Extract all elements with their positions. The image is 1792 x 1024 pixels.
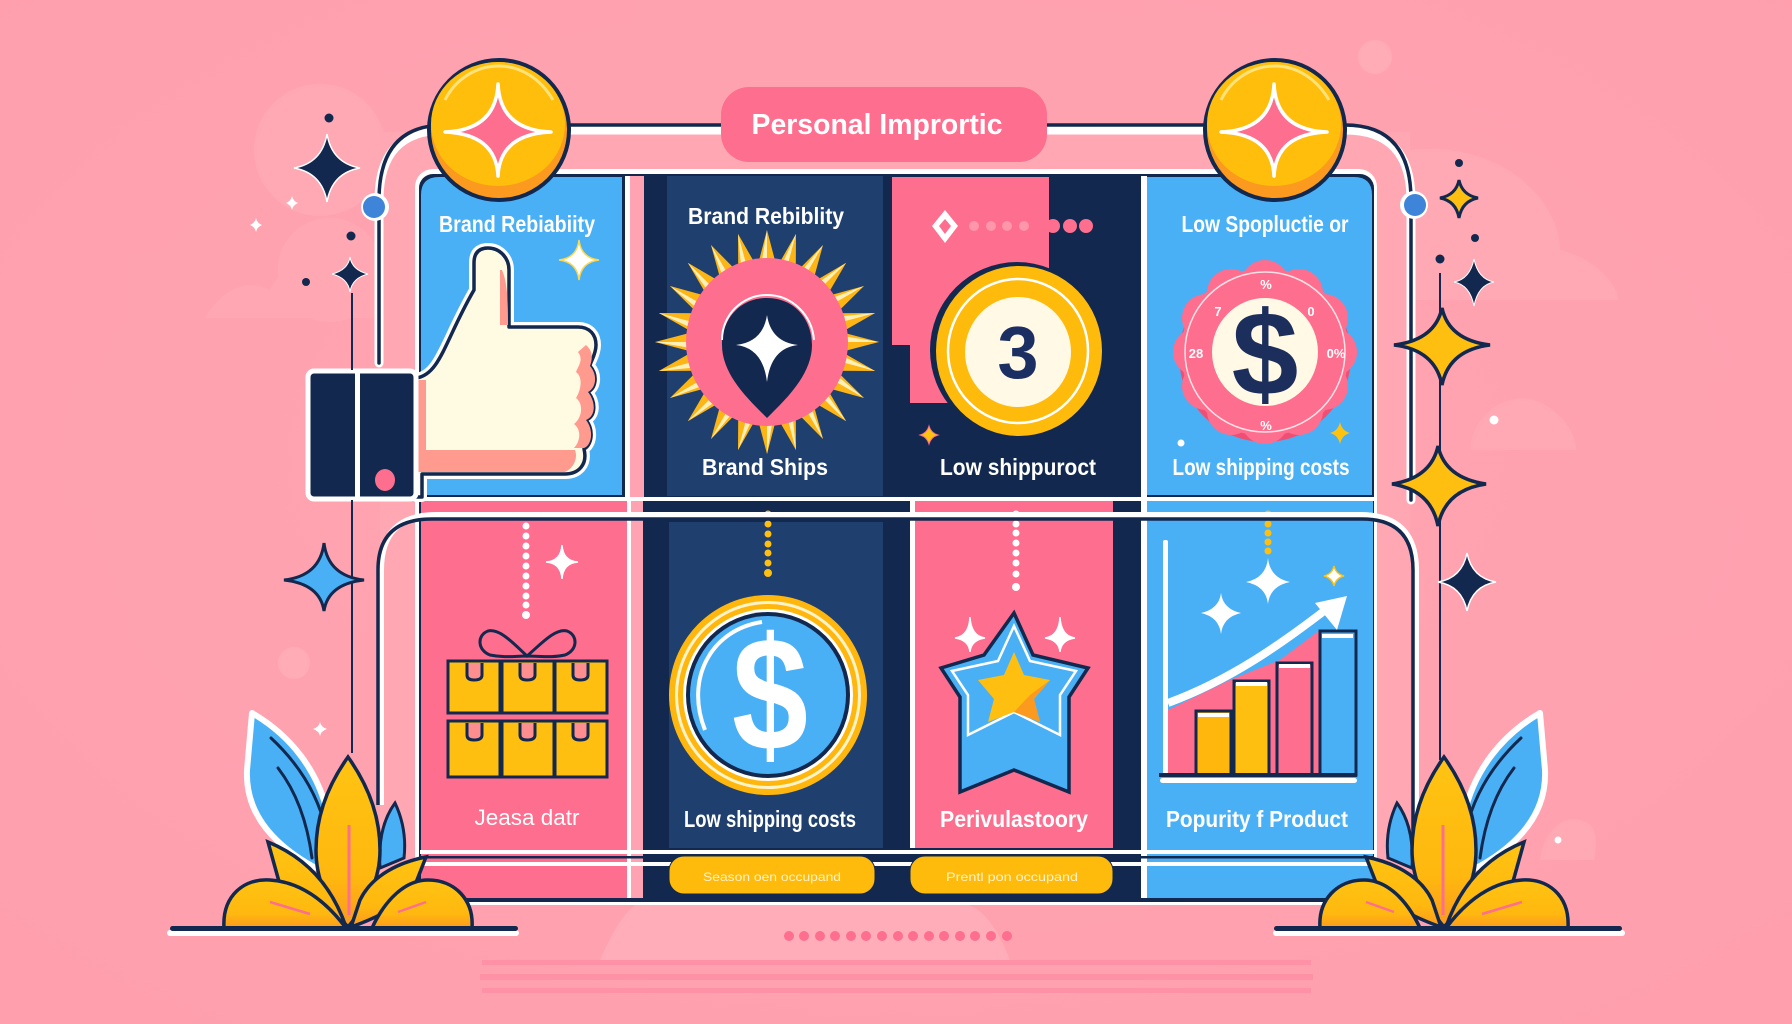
icon: sunburst badge <box>655 230 879 454</box>
second connector frame <box>378 515 1416 835</box>
chart: rising bars <box>1159 540 1357 783</box>
coin: right <box>1203 58 1347 202</box>
footer stripes <box>480 960 1313 993</box>
icon: dollar seal: 28 <box>1189 346 1203 361</box>
icon: dollar seal: % <box>1260 277 1272 292</box>
icon: dollar seal: % <box>1260 418 1272 433</box>
dotted connector <box>1264 510 1272 554</box>
panel: lower row column fills <box>419 497 1374 898</box>
pill: seasons caption <box>669 856 875 894</box>
label: Jeasa datr <box>474 805 580 830</box>
connector nodes <box>361 191 1428 221</box>
panel: gift boxes <box>448 522 607 830</box>
panel: low shipping number coin <box>891 176 1147 498</box>
label: Popurity f Product <box>1166 806 1348 832</box>
label: Low shippuroct <box>940 454 1096 480</box>
dotted connector <box>764 510 772 577</box>
divider rails <box>420 850 1374 866</box>
label: Low shipping costs <box>684 806 856 832</box>
icon: number coin: 3 <box>997 311 1039 394</box>
label: Perivulastoory <box>940 806 1088 832</box>
title pill <box>721 87 1047 162</box>
sparkles: left <box>250 114 368 736</box>
panel: star ribbon badge <box>940 510 1088 832</box>
dotted connector <box>1012 510 1020 591</box>
icon: dollar seal <box>1173 260 1357 444</box>
label: Low Spopluctie or <box>1182 211 1349 237</box>
dotted connector <box>522 522 530 619</box>
panels grid <box>415 169 1377 905</box>
pill: prentl caption: Prentl pon occupand <box>946 870 1078 884</box>
icon: gift box grid <box>448 631 607 777</box>
icon: sparkles <box>1201 558 1290 634</box>
pill: prentl caption <box>910 856 1113 894</box>
icon: dollar coin: $ <box>732 604 808 785</box>
icon: star ribbon <box>941 613 1088 792</box>
icon: number coin <box>930 262 1104 438</box>
icon: dollar coin <box>669 595 867 795</box>
pagination dots <box>784 931 1012 941</box>
label: Brand Ships <box>702 454 828 480</box>
title: Personal Imprortic <box>752 109 1002 141</box>
icon: progress dots <box>932 210 1093 243</box>
plant: left <box>167 713 519 936</box>
label: Low shipping costs <box>1172 454 1350 480</box>
panel: brand reliability thumb <box>421 176 630 498</box>
icon: sparkle <box>559 240 599 280</box>
panel: column backgrounds <box>419 174 1374 902</box>
label: Brand Rebiblity <box>688 203 844 229</box>
icon: small sparkle <box>1330 422 1350 444</box>
icon: small sparkle <box>920 426 938 444</box>
panel: low shipping costs coin <box>669 510 883 848</box>
icon: dollar seal: 0 <box>1307 304 1315 319</box>
pill: seasons caption: Season oen occupand <box>703 870 841 884</box>
outer connector frame <box>379 125 1411 500</box>
icon: plus sparkle <box>546 545 578 579</box>
sparkles: right <box>1392 159 1562 844</box>
icon: dollar seal: 0% <box>1327 346 1346 361</box>
icon: thumbs up <box>308 248 596 499</box>
icon: dollar seal: 7 <box>1214 304 1222 319</box>
icon: dollar seal: $ <box>1232 287 1298 421</box>
panel: low shipping costs badge <box>1147 177 1372 495</box>
thin side lines <box>352 273 1440 760</box>
plant: right <box>1273 713 1625 936</box>
cuff <box>308 371 416 499</box>
coin: left <box>427 58 571 202</box>
panel: popularity chart <box>1159 510 1357 832</box>
label: Brand Rebiabiity <box>439 211 595 237</box>
panel: brand ships sun <box>644 176 891 496</box>
icon: sparkles <box>955 617 1075 652</box>
hand <box>416 248 596 497</box>
